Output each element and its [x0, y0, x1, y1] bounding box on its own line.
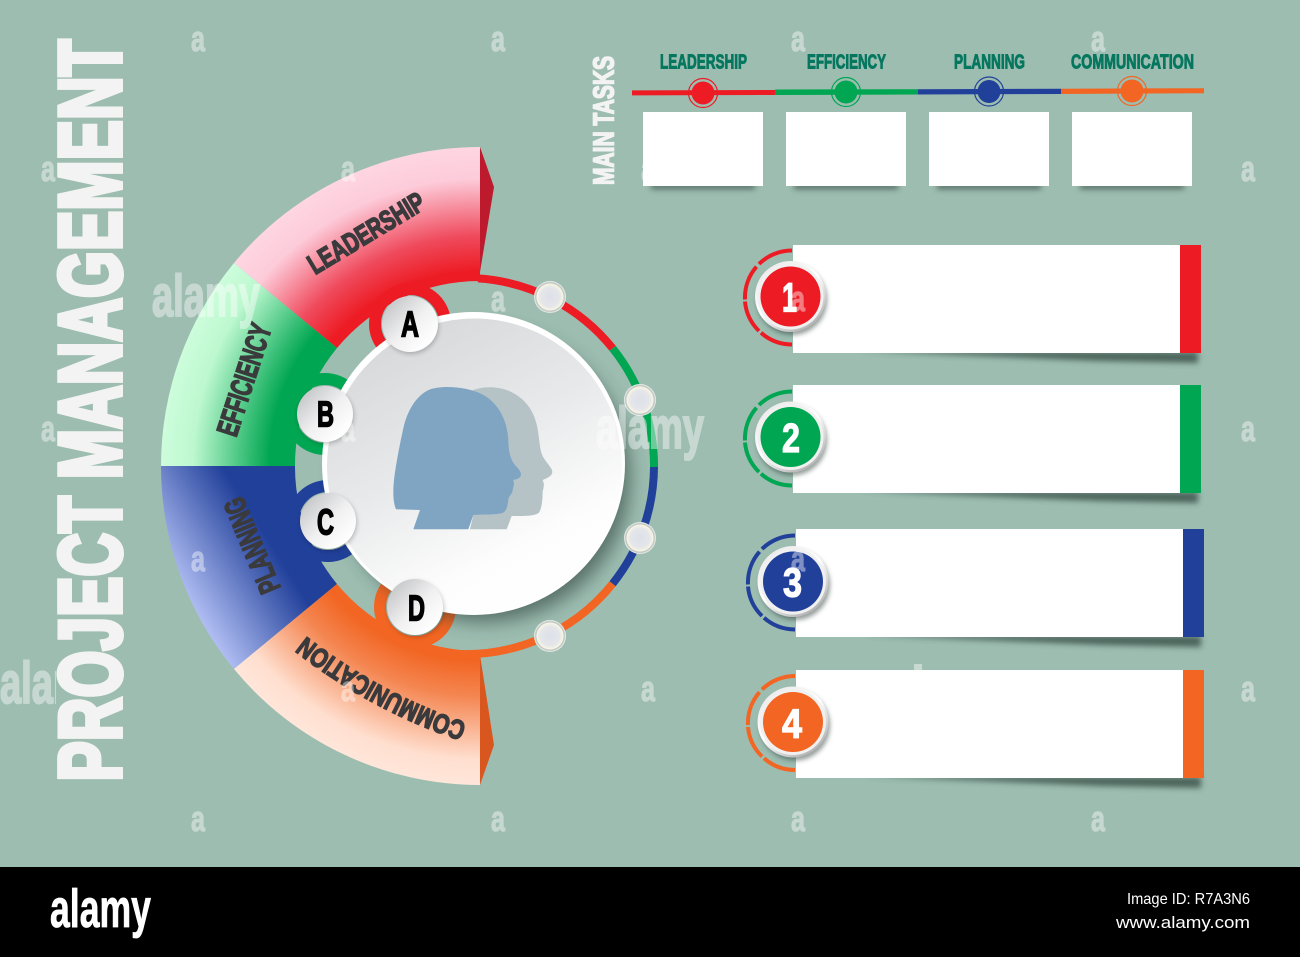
segment: leadership [234, 147, 494, 348]
watermarks: a [641, 148, 656, 189]
watermarks: alamy [0, 651, 108, 716]
segment: planning: PLANNING [218, 492, 287, 598]
watermarks: a [191, 538, 206, 579]
task card 3 [929, 112, 1049, 189]
watermarks: a [1241, 668, 1256, 709]
button C [300, 493, 357, 551]
watermarks: a [491, 798, 506, 839]
list row 3 [748, 529, 1204, 647]
timeline markers [688, 76, 1146, 108]
watermarks: a [791, 538, 806, 579]
watermarks: a [791, 18, 806, 59]
footer url: www.alamy.com [1115, 913, 1250, 932]
watermarks: a [641, 668, 656, 709]
list row 1: 1 [782, 274, 797, 320]
watermarks: alamy [596, 396, 704, 461]
watermarks: a [491, 278, 506, 319]
button D: D [408, 588, 425, 628]
watermarks: a [791, 278, 806, 319]
list row 1 [745, 245, 1201, 363]
segment: communication: COMMUNICATION [294, 636, 465, 740]
watermarks: a [791, 798, 806, 839]
task card 2 [786, 112, 906, 189]
task card 4 [1072, 112, 1192, 189]
task labels [660, 52, 1194, 74]
watermarks: a [341, 408, 356, 449]
task labels: PLANNING [954, 52, 1025, 74]
task labels: EFFICIENCY [807, 52, 886, 74]
button C: C [317, 502, 334, 542]
watermarks: a [41, 408, 56, 449]
colored collars behind letter buttons [290, 289, 450, 642]
footer image id: Image ID: R7A3N6 [1127, 891, 1250, 908]
segment: communication [234, 584, 494, 785]
task labels: LEADERSHIP [660, 52, 747, 74]
watermarks: a [1091, 18, 1106, 59]
watermarks: a [341, 148, 356, 189]
button A [382, 296, 439, 354]
button A: A [401, 304, 419, 344]
icon: blue head silhouette [393, 387, 521, 529]
icon: gray head silhouette [467, 387, 552, 529]
segment: leadership: LEADERSHIP [302, 186, 430, 280]
ring knobs [534, 281, 656, 652]
footer bar [0, 867, 1300, 957]
outer colored ring [440, 278, 654, 654]
watermarks: a [191, 798, 206, 839]
watermarks: a [341, 668, 356, 709]
watermarks: a [191, 18, 206, 59]
button D [387, 579, 444, 637]
semicircular fan diagram [161, 147, 494, 785]
list row 2: 2 [782, 415, 800, 461]
watermarks: a [41, 148, 56, 189]
watermarks: a [1091, 798, 1106, 839]
list row 2 [745, 385, 1201, 503]
list row 3: 3 [783, 560, 802, 606]
segment: efficiency [161, 263, 337, 466]
central disc with head silhouettes [322, 312, 630, 622]
button B: B [317, 394, 334, 434]
segment: efficiency: EFFICIENCY [211, 320, 279, 440]
list row 4 [748, 670, 1204, 788]
heading: main tasks: MAIN TASKS [588, 56, 620, 185]
watermarks: a [1241, 408, 1256, 449]
timeline line [632, 88, 1204, 95]
task card 1 [643, 112, 763, 189]
main tasks timeline [632, 52, 1204, 108]
button B [297, 386, 354, 444]
task labels: COMMUNICATION [1071, 52, 1194, 74]
watermarks: alamy [152, 264, 260, 329]
watermarks: a [1241, 148, 1256, 189]
list row 4: 4 [782, 700, 802, 746]
footer logo: alamy [50, 879, 151, 939]
segment: planning [161, 466, 337, 669]
watermarks: a [491, 18, 506, 59]
